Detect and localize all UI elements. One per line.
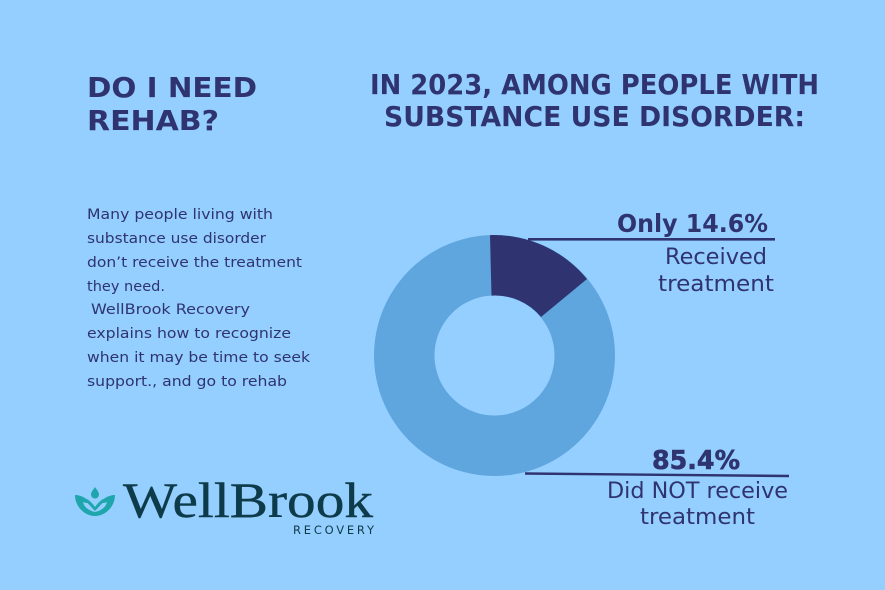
heading: 2023 statistic: SUBSTANCE USE DISORDER: xyxy=(384,100,805,133)
segment: did not receive treatment 85.4% xyxy=(374,235,615,476)
callout: did not receive treatment: 85.4% xyxy=(652,446,740,476)
callout: received treatment: Only 14.6% xyxy=(617,209,768,238)
callout: did not receive treatment xyxy=(525,446,789,530)
title: do I need rehab: REHAB? xyxy=(87,104,219,137)
callout: received treatment: treatment xyxy=(658,272,774,297)
wordmark: WellBrook xyxy=(123,472,373,528)
body text block xyxy=(87,207,311,390)
body text block: they need. xyxy=(87,279,165,295)
tagline: RECOVERY xyxy=(293,523,375,537)
body text block: explains how to recognize xyxy=(87,326,291,342)
body text block: Many people living with xyxy=(87,207,273,223)
callout: did not receive treatment: treatment xyxy=(640,505,755,530)
body text block: WellBrook Recovery xyxy=(91,302,250,318)
body text block: substance use disorder xyxy=(87,231,266,247)
body text block: support., and go to rehab xyxy=(87,374,287,390)
logo: WellBrook Recovery xyxy=(75,472,375,537)
segment: received treatment 14.6% xyxy=(490,235,587,317)
callout: received treatment xyxy=(528,209,775,297)
callout: did not receive treatment: Did NOT receive xyxy=(607,479,788,504)
callout: received treatment: Received xyxy=(665,245,767,270)
donut chart xyxy=(374,235,615,476)
title: do I need rehab xyxy=(87,71,257,137)
title: do I need rehab: DO I NEED xyxy=(87,71,257,104)
icon: lotus xyxy=(75,487,115,516)
heading: 2023 statistic xyxy=(370,68,819,133)
heading: 2023 statistic: IN 2023, AMONG PEOPLE WITH xyxy=(370,68,819,101)
body text block: don’t receive the treatment xyxy=(87,255,302,271)
body text block: when it may be time to seek xyxy=(87,350,311,366)
